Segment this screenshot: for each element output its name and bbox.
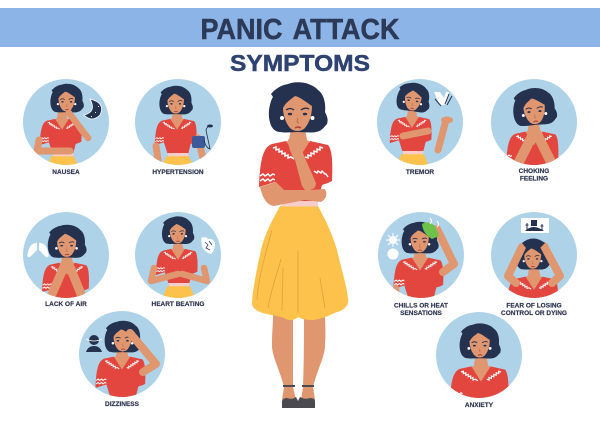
- panel: lack of air: [23, 212, 109, 308]
- figure: [450, 323, 508, 398]
- icon: sun: [386, 233, 400, 247]
- icon: snowflake: [388, 248, 398, 260]
- panel: hypertension: [135, 79, 221, 176]
- label: SENSATIONS: [400, 310, 443, 317]
- label: HYPERTENSION: [152, 169, 204, 176]
- icon: cold compress: [422, 222, 439, 239]
- figure: [151, 216, 207, 301]
- circle: [135, 212, 221, 298]
- icon: lungs: [27, 243, 49, 257]
- circle: [135, 79, 221, 165]
- panel: dizziness: [79, 311, 165, 408]
- sleeve trim: [314, 171, 328, 177]
- label: TREMOR: [406, 169, 434, 176]
- circle: [378, 212, 464, 298]
- label: LACK OF AIR: [45, 301, 87, 308]
- icon: heart: [201, 237, 215, 254]
- central figure: [252, 82, 348, 408]
- blouse: [259, 129, 332, 206]
- label: DIZZINESS: [105, 401, 140, 408]
- panel: nausea: [23, 79, 109, 176]
- circle: [23, 212, 109, 298]
- figure: [390, 81, 453, 169]
- circle: [23, 79, 109, 165]
- icon: shaking fingers: [434, 92, 452, 106]
- header band: [0, 8, 600, 47]
- figure: [42, 225, 89, 305]
- panel: fear of losing control or dying: [491, 212, 577, 322]
- panel: tremor: [377, 79, 463, 176]
- figure: [37, 84, 88, 171]
- circle: [79, 311, 165, 397]
- icon: blood pressure cuff: [192, 124, 213, 149]
- figure: [393, 222, 454, 302]
- circle: [491, 79, 577, 165]
- icon: heat squiggles: [430, 218, 438, 227]
- circle: [436, 312, 522, 398]
- circle: [377, 79, 463, 165]
- shoes: [282, 385, 315, 408]
- figure: [155, 86, 203, 171]
- crossed arm: [260, 182, 326, 206]
- figure: [95, 321, 156, 401]
- label: HEART BEATING: [152, 301, 204, 308]
- subtitle: SYMPTOMS: [230, 50, 370, 76]
- figure: [506, 88, 558, 165]
- label: [394, 302, 448, 317]
- label: ANXIETY: [465, 402, 494, 409]
- icon: graveyard: [521, 218, 549, 233]
- title: PANIC ATTACK: [200, 14, 400, 46]
- circle: [491, 212, 577, 298]
- icon: dizzy person: [86, 335, 102, 352]
- label: FEELING: [520, 176, 548, 182]
- skirt: [252, 206, 348, 320]
- label: CHOKING: [519, 168, 549, 175]
- figure: [504, 238, 564, 298]
- panel: choking feeling: [491, 79, 577, 182]
- panel: chills or heat sensations: [378, 212, 464, 317]
- label: CHILLS OR HEAT: [394, 302, 448, 310]
- label: CONTROL OR DYING: [501, 310, 567, 317]
- panel: heart beating: [135, 212, 221, 308]
- head: [269, 82, 328, 132]
- panel: anxiety: [436, 312, 522, 408]
- raised arm: [288, 135, 316, 190]
- label: NAUSEA: [52, 169, 80, 176]
- label: FEAR OF LOSING: [506, 302, 562, 310]
- label: [501, 302, 567, 317]
- label: [519, 168, 549, 182]
- legs: [272, 315, 325, 400]
- icon: moon: [84, 99, 102, 119]
